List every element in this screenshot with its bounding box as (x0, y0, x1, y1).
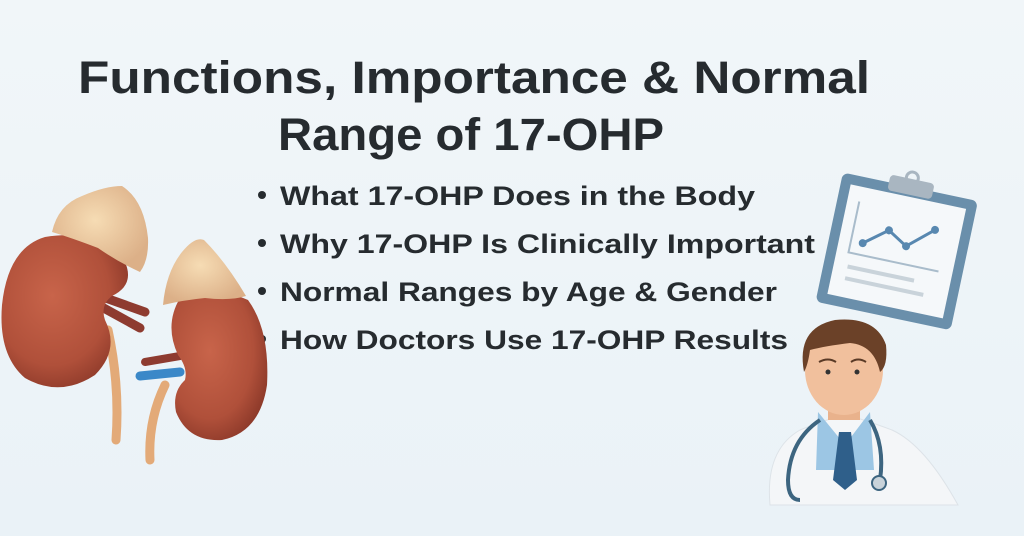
left kidney (1, 235, 128, 387)
illustration: kidneys with adrenal glands (1, 186, 267, 460)
illustration: doctor (769, 320, 958, 505)
tie (833, 432, 857, 490)
stethoscope (788, 420, 881, 500)
icon: clipboard with chart (816, 158, 981, 330)
right adrenal (163, 239, 246, 305)
bullet list: How Doctors Use 17-OHP Results (280, 325, 788, 355)
bullet list: What 17-OHP Does in the Body (280, 181, 755, 211)
right ureter (150, 385, 165, 460)
hair (803, 320, 886, 372)
title (78, 52, 870, 160)
bullet list: Why 17-OHP Is Clinically Important (280, 229, 815, 259)
bullet list: Normal Ranges by Age & Gender (280, 277, 778, 307)
title: Functions, Importance & Normal (78, 52, 870, 103)
left adrenal (52, 186, 148, 272)
title: Range of 17-OHP (278, 109, 664, 160)
head (805, 325, 883, 415)
coat (769, 415, 958, 505)
right vessels (145, 356, 180, 362)
shirt (816, 412, 874, 470)
bullet list (258, 181, 815, 355)
right kidney (171, 292, 267, 440)
left ureter (108, 330, 117, 440)
neck (828, 395, 860, 420)
left vessels (100, 296, 145, 328)
